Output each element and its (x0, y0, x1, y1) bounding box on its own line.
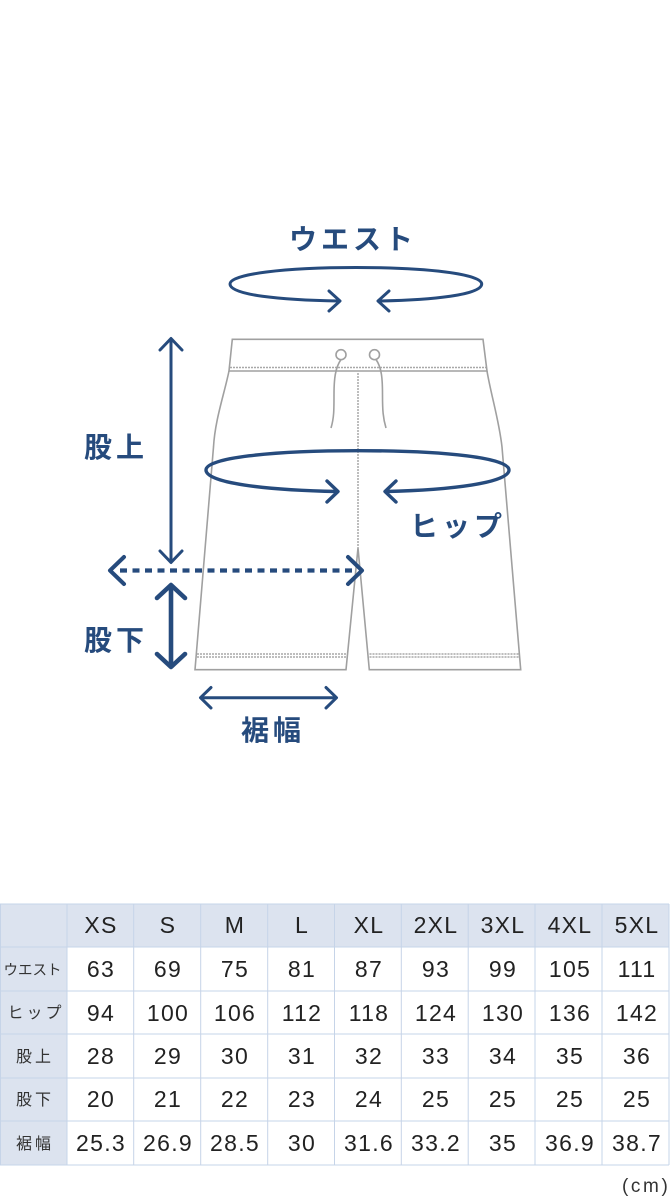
row: hip: 112 (282, 1000, 322, 1026)
table header row: 5XL (615, 912, 659, 938)
diagram: shorts measurement (84, 224, 521, 746)
row: inseam: 22 (221, 1086, 249, 1112)
row: hem width: 31.6 (344, 1130, 394, 1156)
row: waist: 69 (154, 956, 182, 982)
row: waist: 105 (549, 956, 591, 982)
heading: hip: ヒップ (410, 511, 506, 542)
row: hem width: 30 (288, 1130, 316, 1156)
heading: waist: ウエスト (289, 224, 417, 255)
heading: hem width: 裾幅 (241, 715, 305, 746)
table header row: 2XL (414, 912, 458, 938)
row: inseam: 20 (87, 1086, 115, 1112)
row: inseam: 21 (154, 1086, 182, 1112)
row: inseam: 25 (623, 1086, 651, 1112)
arrow: hip (206, 451, 509, 502)
row: rise: 35 (556, 1043, 584, 1069)
arrow: rise (160, 338, 182, 562)
row: waist: ウエスト (4, 962, 62, 979)
row: hem width: 25.3 (76, 1130, 126, 1156)
row: hip: 124 (415, 1000, 457, 1026)
row: rise: 32 (355, 1043, 383, 1069)
shorts outline (195, 339, 521, 670)
row: inseam (16, 1086, 651, 1112)
row: inseam: 24 (355, 1086, 383, 1112)
row: inseam: 25 (556, 1086, 584, 1112)
row: hip: 106 (214, 1000, 256, 1026)
row: waist: 75 (221, 956, 249, 982)
row: waist: 111 (618, 956, 656, 982)
row: waist: 99 (489, 956, 517, 982)
row: rise: 33 (422, 1043, 450, 1069)
row: hip: 118 (349, 1000, 389, 1026)
table backgrounds (0, 904, 669, 1165)
arrow: hem width (200, 688, 336, 708)
row: hip: 142 (616, 1000, 658, 1026)
row: waist: 81 (288, 956, 316, 982)
row: hem width (16, 1130, 662, 1156)
table grid (0, 904, 669, 1165)
row: hip: 100 (147, 1000, 189, 1026)
row: inseam: 23 (288, 1086, 316, 1112)
arrow: waist (230, 268, 482, 311)
row: rise: 29 (154, 1043, 182, 1069)
row: hip: ヒップ (7, 1004, 65, 1022)
row: inseam: 25 (489, 1086, 517, 1112)
row: hip: 130 (482, 1000, 524, 1026)
row: waist (4, 956, 656, 982)
table header row: 4XL (548, 912, 592, 938)
row: inseam: 25 (422, 1086, 450, 1112)
row: hem width: 裾幅 (16, 1135, 54, 1153)
size table (0, 904, 669, 1165)
arrow: inseam (157, 585, 185, 667)
table header row (84, 912, 659, 938)
row: rise: 34 (489, 1043, 517, 1069)
table header row: 3XL (481, 912, 525, 938)
row: rise: 30 (221, 1043, 249, 1069)
row: rise: 36 (623, 1043, 651, 1069)
row: hip (7, 1000, 658, 1026)
row: inseam: 股下 (16, 1091, 54, 1109)
heading: inseam: 股下 (84, 625, 148, 656)
row: hem width: 26.9 (143, 1130, 193, 1156)
row: rise: 股上 (16, 1048, 54, 1066)
row: hem width: 33.2 (411, 1130, 461, 1156)
row: hem width: 28.5 (210, 1130, 260, 1156)
unit note: (cm) (622, 1176, 670, 1197)
table header row: M (225, 912, 245, 938)
row: rise: 28 (87, 1043, 115, 1069)
row: hem width: 36.9 (545, 1130, 595, 1156)
table header row: XS (84, 912, 118, 938)
arrow: thigh width dashed (110, 557, 362, 584)
row: hem width: 38.7 (612, 1130, 662, 1156)
heading: rise: 股上 (84, 432, 148, 463)
row: rise: 31 (288, 1043, 316, 1069)
table header row: S (160, 912, 176, 938)
row: hip: 94 (87, 1000, 115, 1026)
table header row: XL (354, 912, 384, 938)
row: hip: 136 (549, 1000, 591, 1026)
row: waist: 93 (422, 956, 450, 982)
row: hem width: 35 (489, 1130, 517, 1156)
row: waist: 87 (355, 956, 383, 982)
row: rise (16, 1043, 651, 1069)
row: waist: 63 (87, 956, 115, 982)
table header row: L (295, 912, 309, 938)
